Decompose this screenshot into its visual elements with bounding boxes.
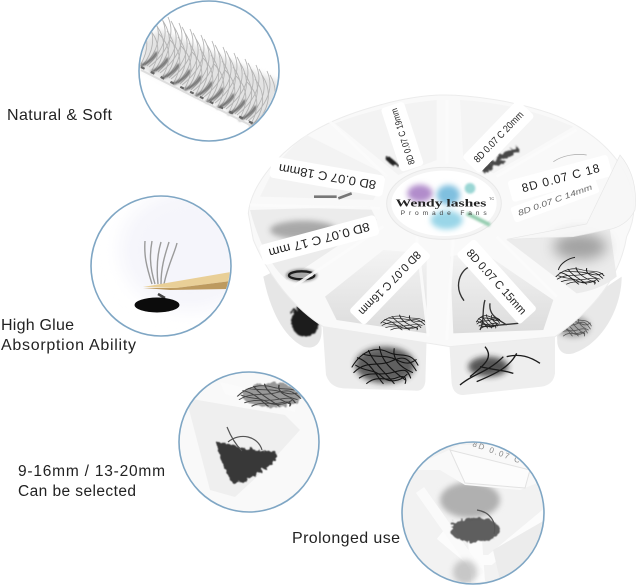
label 15mm (456, 238, 537, 325)
circle: lash strip closeup (137, 1, 281, 141)
label 19mm (381, 101, 424, 172)
circle: prolonged use closeup (402, 439, 550, 584)
label 16mm (349, 241, 431, 326)
label 18mm open (507, 154, 613, 202)
logo sticker: TC (489, 196, 494, 201)
label 19mm: 8D 0.07 C 19mm (389, 107, 417, 166)
caption: high glue absorption ability: High Glue (1, 317, 74, 334)
lower compartment: centre-left bulge (323, 327, 427, 391)
label 18mm: 8D 0.07 C 18mm (278, 161, 377, 192)
logo sticker: Promade Fans (401, 210, 487, 217)
label 15mm: 8D 0.07 C 15mm (464, 247, 528, 317)
centre hub rim (387, 167, 501, 239)
logo sticker (391, 171, 497, 236)
label 18mm open: 8D 0.07 C 18 (520, 161, 601, 195)
label 17mm (259, 214, 380, 266)
label 18mm (269, 156, 386, 197)
logo sticker: Wendy lashes (396, 197, 486, 209)
product: round lash tray (248, 95, 636, 395)
open lid (507, 155, 636, 239)
compartment 17mm (250, 207, 377, 280)
lower compartment: right bulge (555, 277, 622, 354)
caption: length selection: 9-16mm / 13-20mm (18, 463, 165, 480)
circle: prolonged use closeup: 8D 0.07 C (471, 439, 522, 465)
caption: natural and soft: Natural & Soft (7, 107, 113, 124)
compartment right open (507, 230, 617, 293)
label 20mm (462, 100, 535, 174)
label 17mm: 8D 0.07 C 17 mm (267, 219, 371, 260)
lower compartment: centre-right bulge (449, 328, 555, 395)
circle: glue absorption (90, 195, 232, 337)
caption: prolonged use: Prolonged use (292, 530, 400, 547)
tray lid disc (248, 95, 634, 347)
tray spokes (250, 100, 577, 340)
caption: length selection: Can be selected (18, 483, 136, 500)
glue drop (134, 298, 180, 312)
compartment 16mm (325, 250, 427, 333)
caption: high glue absorption ability: Absorption Ability (1, 337, 136, 354)
label 14mm faint: 8D 0.07 C 14mm (517, 182, 594, 218)
label 14mm faint (510, 177, 600, 223)
circle: compartment closeup (179, 372, 319, 512)
tweezers (143, 272, 231, 288)
label 20mm: 8D 0.07 C 20mm (472, 110, 526, 165)
lash fan (145, 241, 177, 284)
label 16mm: 8D 0.07 C 16mm (356, 248, 423, 317)
lower compartment: left bulge (263, 267, 322, 348)
compartment 20mm (460, 100, 573, 173)
lashes in compartments (286, 149, 604, 330)
compartment 15mm (450, 250, 553, 333)
compartment 19mm (335, 100, 437, 175)
compartment 18mm (260, 135, 387, 200)
